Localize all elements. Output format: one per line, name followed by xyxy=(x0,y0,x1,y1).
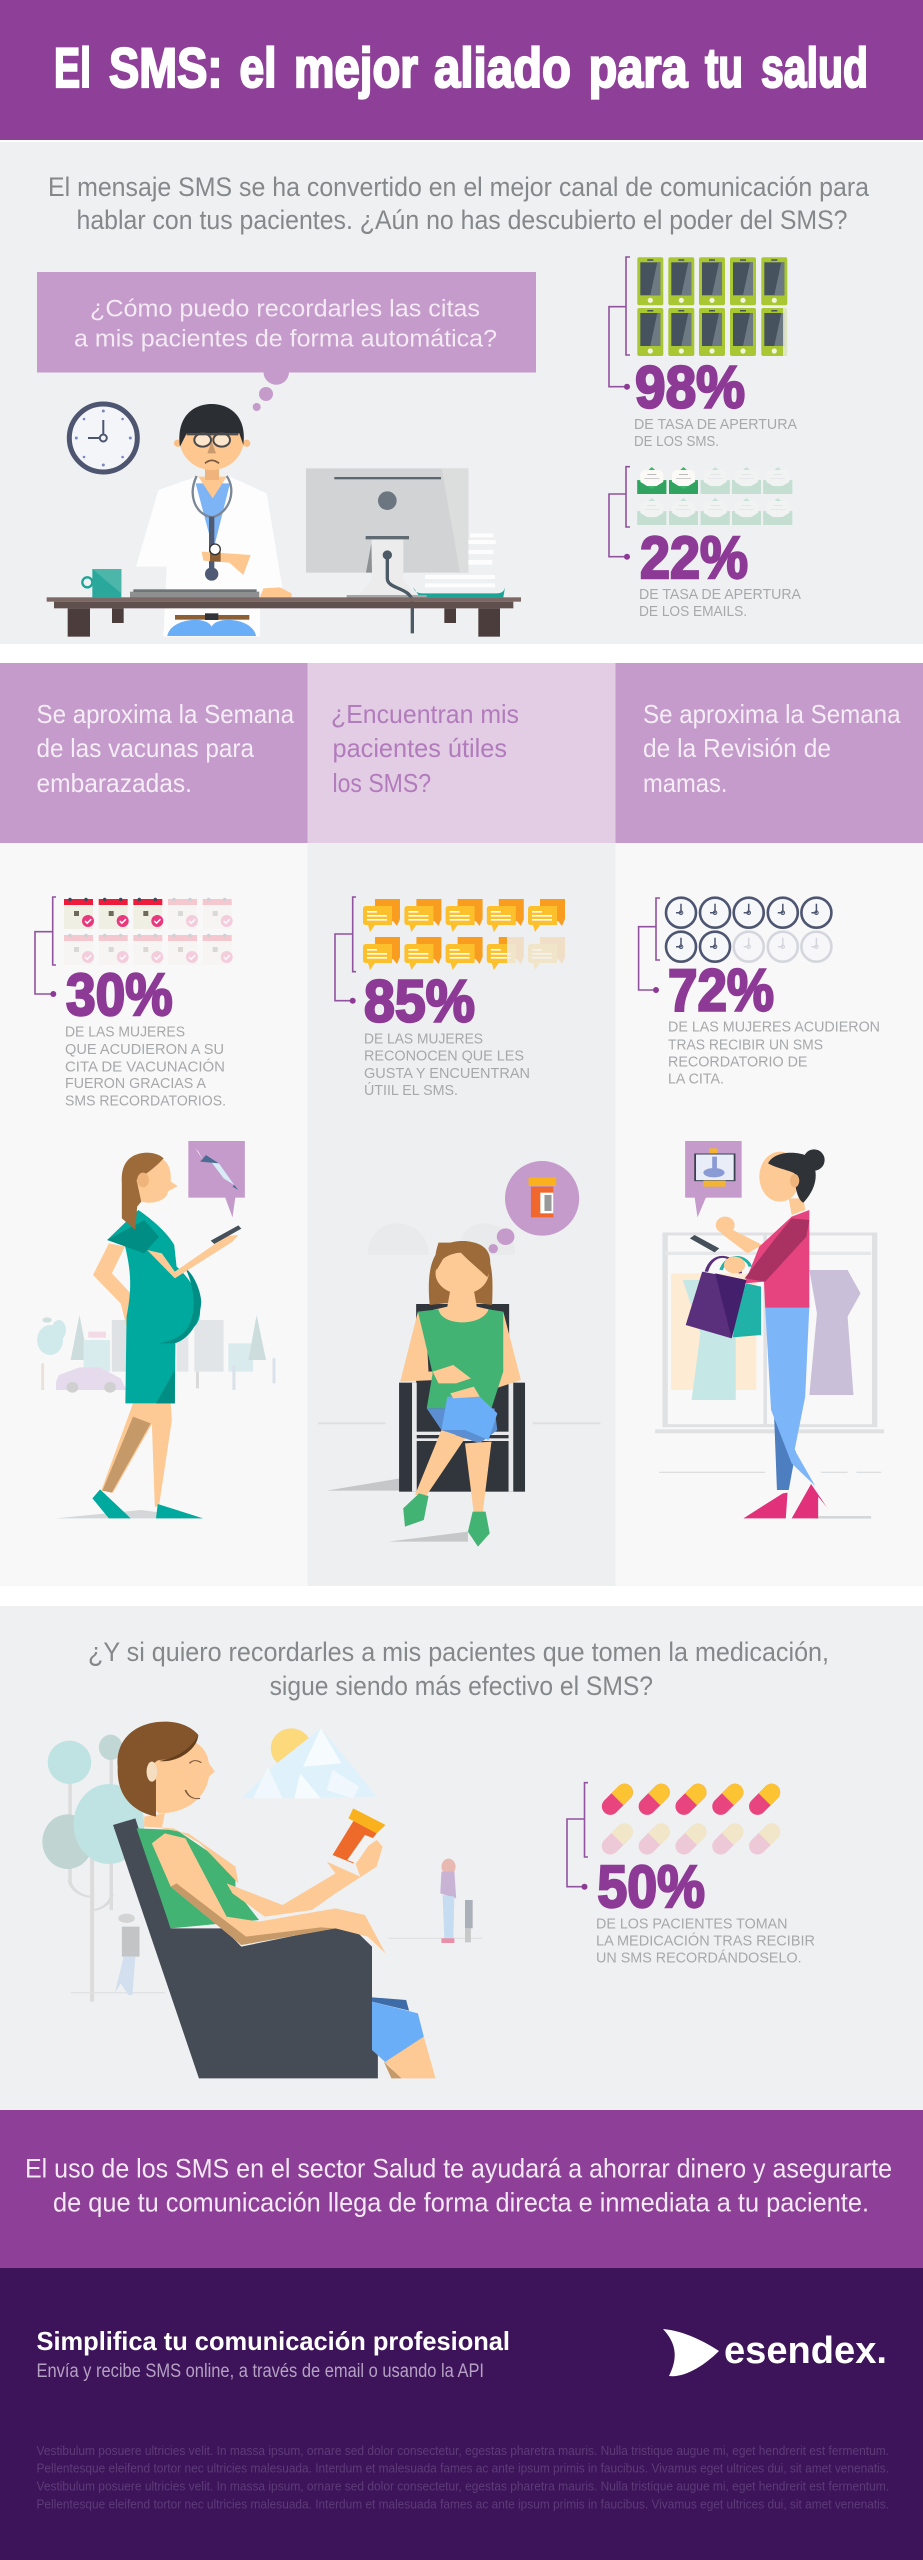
stat: 85%: 85% xyxy=(364,969,475,1035)
logo: esendex xyxy=(663,2329,887,2376)
panel: column 2 heading: ¿Encuentran mis xyxy=(331,699,519,729)
panel: column 2 body xyxy=(308,843,616,1586)
logo: esendex: esendex. xyxy=(724,2330,887,2372)
heading question: sigue siendo más efectivo el SMS? xyxy=(270,1671,653,1701)
panel: column 1 heading: embarazadas. xyxy=(36,768,192,798)
panel: column 3 heading xyxy=(616,663,923,843)
callout: doctor question: ¿Cómo puedo recordarles las citas xyxy=(90,296,480,322)
heading question: ¿Y si quiero recordarles a mis pacientes que tomen la medicación, xyxy=(88,1637,829,1667)
title: El xyxy=(54,36,91,99)
illustration: pregnant woman with phone xyxy=(37,1141,275,1518)
stat: email 22%: DE TASA DE APERTURA xyxy=(639,586,801,603)
stat: 72%: TRAS RECIBIR UN SMS xyxy=(668,1036,823,1053)
stat: 72%: DE LAS MUJERES ACUDIERON xyxy=(668,1019,880,1036)
footer heading: Simplifica tu comunicación profesional xyxy=(36,2326,510,2356)
icon grid: calendars xyxy=(64,898,233,965)
title: el xyxy=(240,36,276,99)
stat: 50%: DE LOS PACIENTES TOMAN xyxy=(596,1915,788,1932)
illustration: shopping woman xyxy=(655,1141,884,1519)
stat: SMS 98% xyxy=(609,257,797,450)
stat: 30%: FUERON GRACIAS A xyxy=(65,1075,206,1092)
heading question xyxy=(88,1637,829,1701)
title: mejor xyxy=(294,36,418,99)
stat: SMS 98%: 98% xyxy=(635,354,745,420)
stat: 30%: SMS RECORDATORIOS. xyxy=(65,1092,226,1109)
stat: 72%: 72% xyxy=(668,958,774,1024)
stat: 85% xyxy=(335,897,565,1099)
stat: 85%: ÚTIIL EL SMS. xyxy=(364,1082,458,1099)
callout: doctor question: a mis pacientes de forma automática? xyxy=(74,326,497,352)
title: aliado xyxy=(434,36,571,99)
intro text: El mensaje SMS se ha convertido en el mejor canal de comunicación para xyxy=(48,172,870,202)
stat: 30%: QUE ACUDIERON A SU xyxy=(65,1041,224,1058)
stat: 72%: LA CITA. xyxy=(668,1070,724,1087)
icon grid: clocks xyxy=(666,898,831,962)
stat: 30%: 30% xyxy=(66,962,173,1028)
title xyxy=(54,36,868,99)
illustration: seated woman xyxy=(318,1161,600,1547)
icon: wall clock xyxy=(69,404,137,472)
stat: 85%: RECONOCEN QUE LES xyxy=(364,1048,524,1065)
callout: doctor question xyxy=(37,272,536,411)
stat: SMS 98%: DE LOS SMS. xyxy=(634,433,719,450)
illustration: doctor at desk xyxy=(47,404,521,637)
panel: column 3 heading: Se aproxima la Semana xyxy=(643,699,901,729)
fine print xyxy=(36,2443,889,2511)
panel: column 2 heading: los SMS? xyxy=(332,768,431,798)
stat: 50% xyxy=(567,1780,815,1967)
icon: syringe speech bubble xyxy=(188,1141,245,1217)
title: salud xyxy=(761,36,868,99)
panel: conclusion band: de que tu comunicación llega de forma directa e inmediata a tu paciente. xyxy=(53,2188,869,2218)
panel: column 2 heading xyxy=(308,663,616,843)
panel: column 3 heading: mamas. xyxy=(643,768,728,798)
stat: 72% xyxy=(639,898,880,1087)
stat: 85%: GUSTA Y ENCUENTRAN xyxy=(364,1065,530,1082)
stat: 50%: UN SMS RECORDÁNDOSELO. xyxy=(596,1950,802,1967)
stat: SMS 98%: DE TASA DE APERTURA xyxy=(634,416,797,433)
stat: 50%: LA MEDICACIÓN TRAS RECIBIR xyxy=(596,1933,815,1950)
title: tu xyxy=(705,36,743,99)
stat: 85%: DE LAS MUJERES xyxy=(364,1030,483,1047)
stat: email 22%: DE LOS EMAILS. xyxy=(639,603,747,620)
panel: column 2 heading: pacientes útiles xyxy=(332,733,507,763)
icon: thought bubble with pill bottle xyxy=(489,1161,579,1253)
stat: 30%: CITA DE VACUNACIÓN xyxy=(65,1058,225,1075)
title: para xyxy=(589,36,688,99)
icon grid: pills xyxy=(598,1780,784,1858)
panel: column 1 heading: de las vacunas para xyxy=(36,733,254,763)
panel: column 3 body xyxy=(616,843,923,1586)
panel: column 1 heading: Se aproxima la Semana xyxy=(36,699,294,729)
stat: 30% xyxy=(35,897,233,1109)
stat: 72%: RECORDATORIO DE xyxy=(668,1054,808,1071)
panel: conclusion band xyxy=(0,2110,923,2268)
icon grid: envelopes xyxy=(637,467,792,525)
panel: intro section xyxy=(0,142,923,644)
stat: email 22% xyxy=(609,467,801,620)
header panel xyxy=(0,0,923,140)
panel: medication section xyxy=(0,1606,923,2110)
panel: footer xyxy=(0,2268,923,2560)
illustration: woman in armchair xyxy=(42,1722,483,2078)
stat: email 22%: 22% xyxy=(640,525,748,591)
icon grid: chat bubbles xyxy=(363,899,565,970)
stat: 50%: 50% xyxy=(597,1854,705,1920)
stat: 30%: DE LAS MUJERES xyxy=(65,1024,185,1041)
panel: column 3 heading: de la Revisión de xyxy=(643,733,831,763)
footer subheading: Envía y recibe SMS online, a través de email o usando la API xyxy=(36,2361,484,2382)
panel: column 1 body xyxy=(0,843,308,1586)
panel: column 1 heading xyxy=(0,663,308,843)
intro text xyxy=(48,172,870,235)
intro text: hablar con tus pacientes. ¿Aún no has descubierto el poder del SMS? xyxy=(76,205,848,235)
icon: x-ray speech bubble xyxy=(685,1141,742,1217)
title: SMS: xyxy=(109,36,222,99)
icon grid: phones xyxy=(637,257,788,357)
